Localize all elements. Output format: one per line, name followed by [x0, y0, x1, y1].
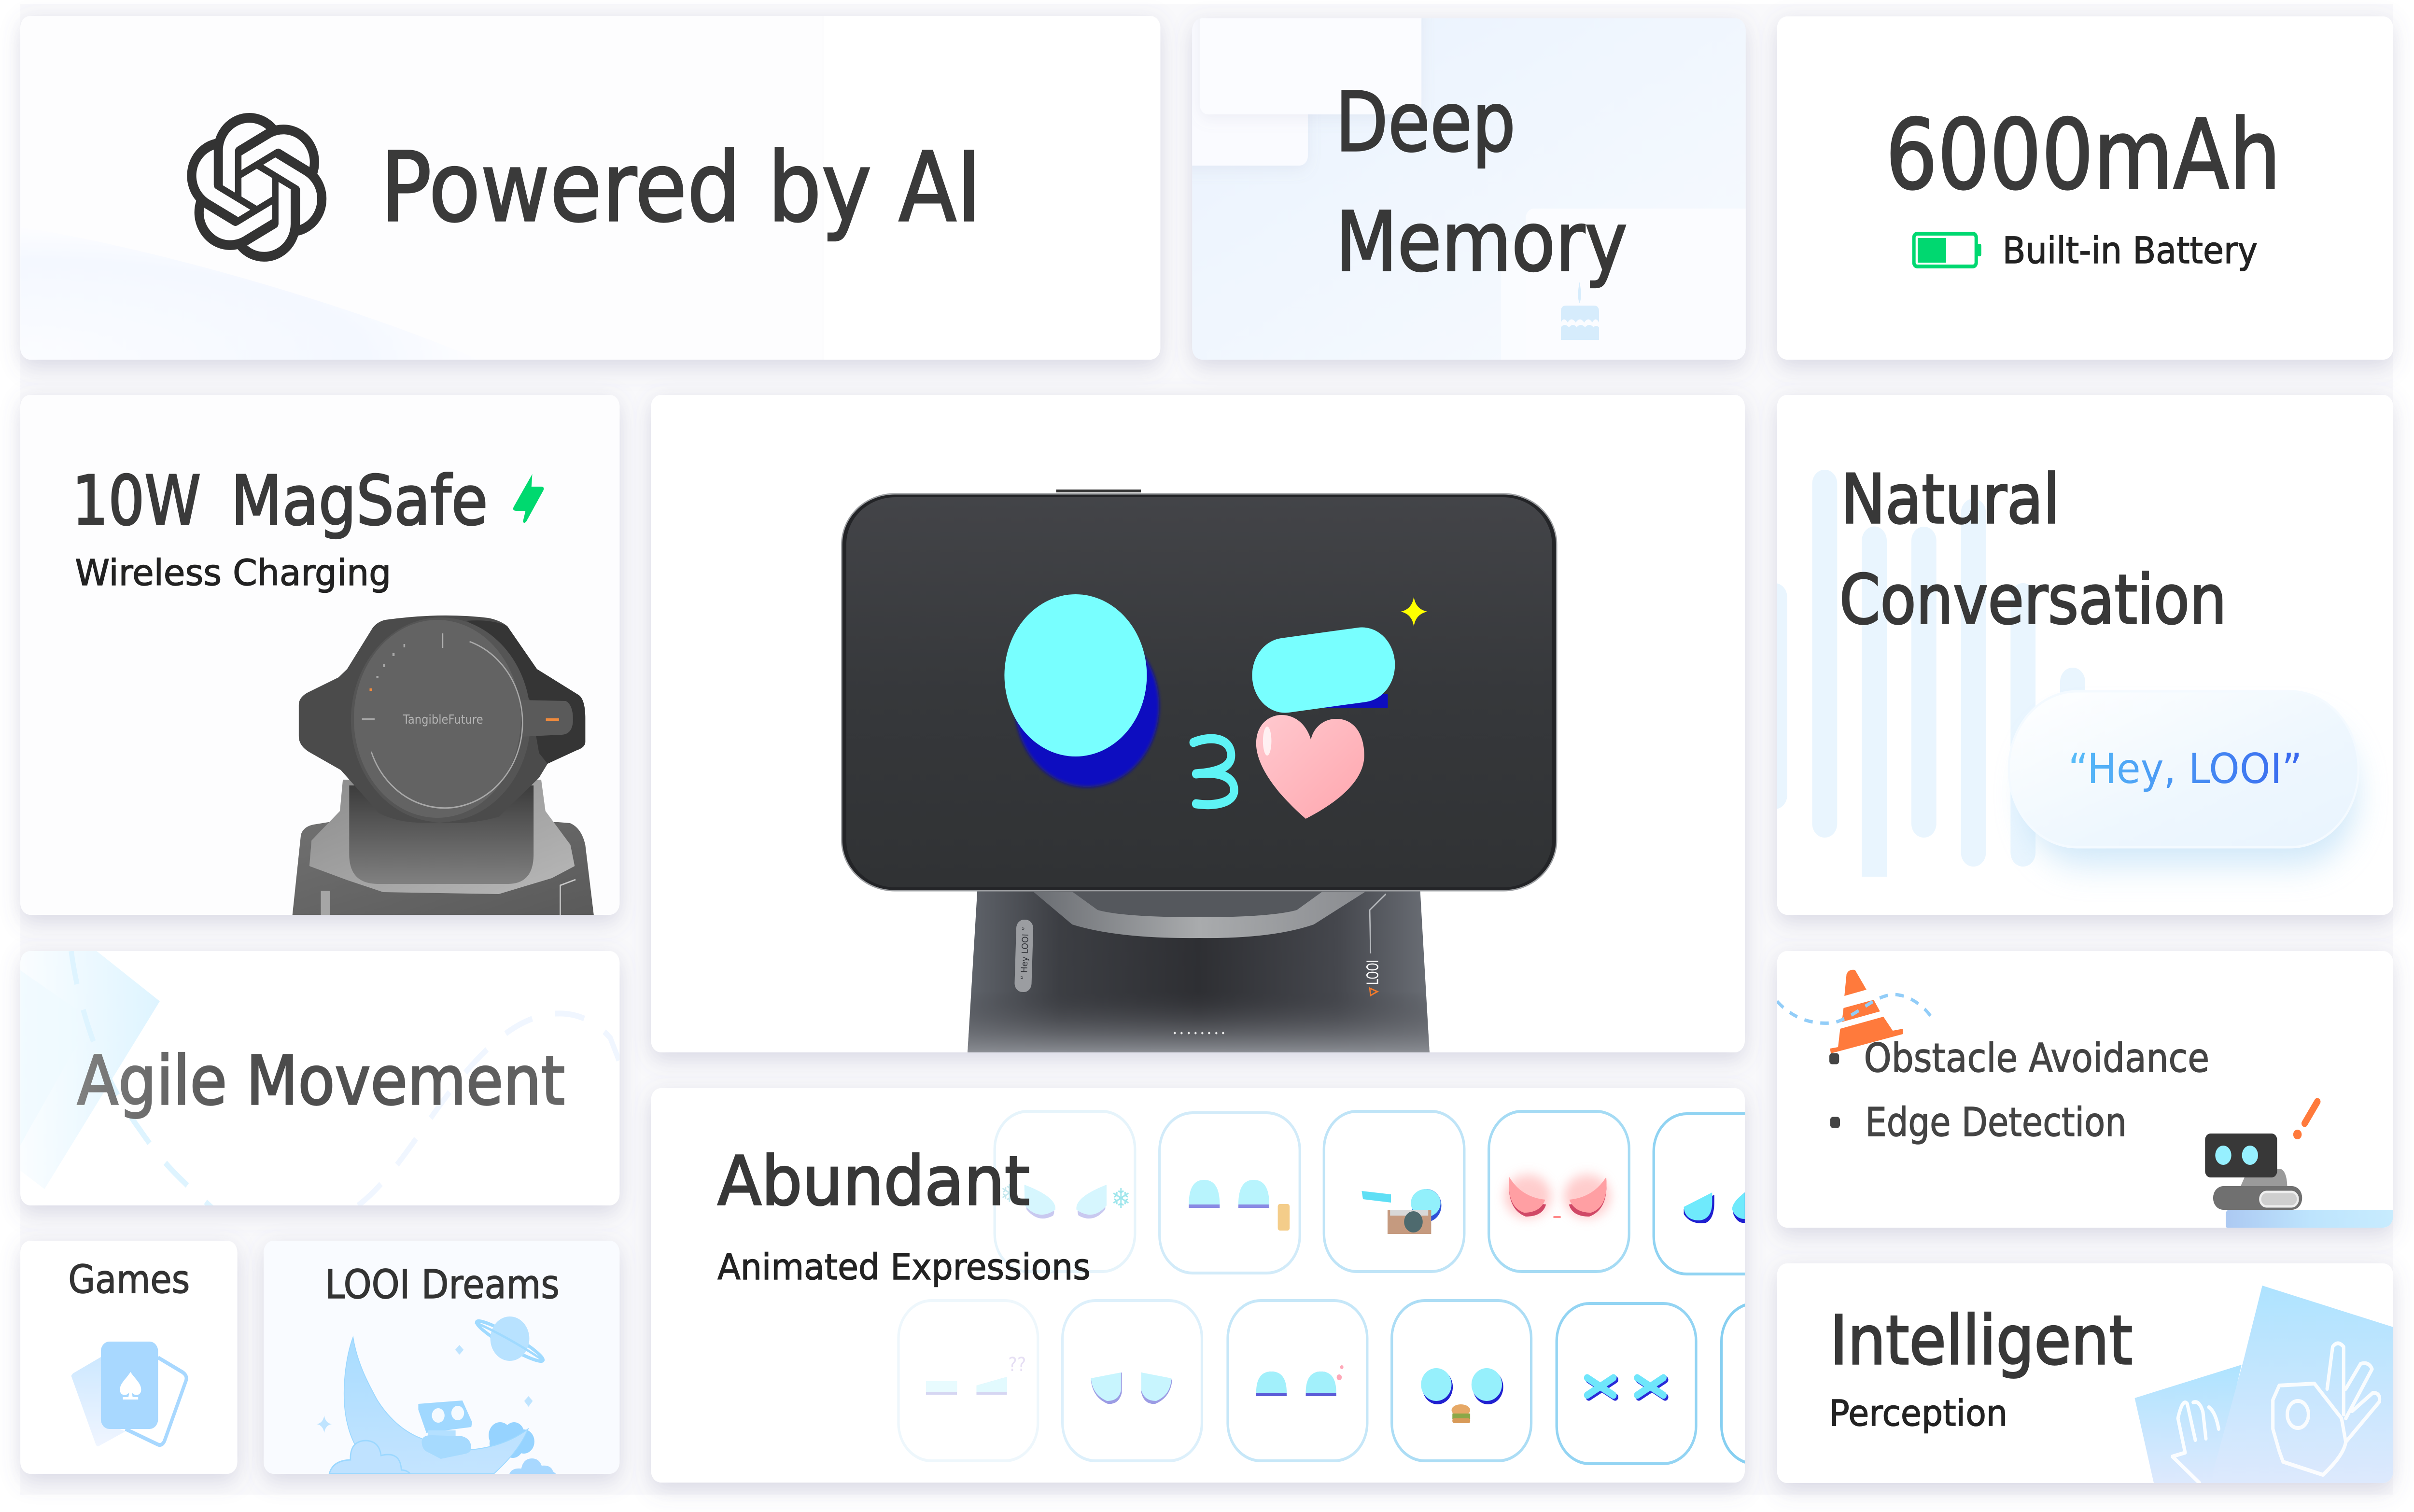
label: Hey LOOI pill: “ Hey LOOI ”	[1020, 926, 1031, 980]
expression: love hearts	[1256, 1365, 1344, 1396]
illustration: robot stand	[968, 891, 1430, 1052]
callout: Hey, LOOI pill	[2009, 691, 2358, 847]
list: obstacle features	[1830, 1036, 2209, 1146]
panel: Agile Movement	[20, 951, 619, 1212]
heading: 10W MagSafe	[72, 462, 488, 541]
panel: Natural Conversation	[1762, 395, 2393, 915]
icon: playing cards	[71, 1342, 186, 1446]
panel: LOOI Dreams	[264, 1241, 619, 1474]
icon: traffic cone	[1830, 970, 1903, 1053]
face: right eye	[1285, 665, 1372, 706]
label: TangibleFuture: TangibleFuture	[403, 712, 483, 727]
icon: pink heart	[1256, 715, 1364, 819]
decoration: dashed path	[1777, 994, 1932, 1023]
text: Perception: Perception	[1829, 1393, 2007, 1434]
expression: snow eyes	[1000, 1179, 1131, 1218]
heading: 10W MagSafe: MagSafe	[231, 462, 488, 541]
heading: 10W MagSafe: 10W	[72, 462, 201, 541]
icon: AI knot logo	[187, 113, 326, 262]
expression: snow eyes: ❄	[1000, 1179, 1019, 1208]
illustration: hand gesture cards	[2135, 1286, 2393, 1483]
heading: Deep Memory	[1335, 75, 1628, 290]
icon: birthday cake	[1561, 282, 1599, 340]
expression: question marks: ??	[1008, 1353, 1026, 1376]
decoration: voice bars	[1762, 470, 2085, 877]
icon: yellow sparkle	[1401, 597, 1427, 627]
heading: Agile Movement: Agile Movement	[77, 1042, 565, 1120]
illustration: phone	[842, 490, 1557, 891]
heading: 6000mAh: 6000mAh	[1885, 99, 2281, 211]
panel: 6000mAh battery	[1777, 16, 2393, 360]
expression: camera	[1361, 1189, 1441, 1234]
expressions: row two	[898, 1301, 1861, 1464]
face: left eye	[1004, 594, 1159, 787]
illustration: robot on the moon	[317, 1316, 556, 1474]
expression: drop eyes	[1684, 1192, 1745, 1223]
panel: Powered by AI	[20, 16, 1160, 360]
panel: central phone on robot	[651, 395, 1745, 1052]
face: kiss mouth	[1193, 739, 1234, 805]
heading: Natural Conversation	[1839, 460, 2227, 640]
heading: Deep Memory: Deep	[1335, 75, 1516, 170]
illustration: MagSafe stand	[293, 616, 594, 915]
heading: LOOI Dreams: LOOI Dreams	[325, 1262, 560, 1308]
heading: Deep Memory: Memory	[1335, 195, 1628, 290]
expressions: row one	[995, 1111, 1794, 1274]
expression: beer	[1189, 1180, 1290, 1231]
heading: Natural Conversation: Natural	[1841, 460, 2060, 539]
callout: Hey, LOOI pill: “Hey, LOOI”	[2068, 745, 2302, 793]
icon: battery	[1914, 234, 1981, 266]
label: Hey LOOI pill	[1014, 919, 1034, 993]
panel: Abundant Animated Expressions	[651, 1088, 1861, 1483]
heading: Natural Conversation: Conversation	[1839, 560, 2227, 640]
expression: sleepy eyes	[1091, 1372, 1172, 1404]
expression: snow eyes: ❄	[1111, 1183, 1131, 1215]
panel: 10W MagSafe	[20, 395, 619, 915]
text: Animated Expressions: Animated Expressions	[717, 1246, 1091, 1288]
expression: X eyes	[1587, 1378, 1665, 1397]
icon: green lightning bolt	[513, 474, 544, 523]
list: obstacle features: Edge Detection	[1865, 1100, 2127, 1146]
list: obstacle features: Obstacle Avoidance	[1864, 1036, 2209, 1081]
panel: Intelligent Perception	[1777, 1263, 2393, 1483]
label: LOOI logo	[1364, 960, 1382, 995]
text: Wireless Charging: Wireless Charging	[75, 552, 391, 594]
heading: Intelligent: Intelligent	[1830, 1302, 2133, 1380]
text: Built-in Battery: Built-in Battery	[2003, 229, 2258, 272]
decoration: diamond and path	[20, 951, 619, 1212]
heading: Games: Games	[68, 1257, 190, 1302]
icon: exclamation mark	[2293, 1102, 2317, 1139]
expression: question marks	[926, 1353, 1026, 1395]
heading: Powered by AI: Powered by AI	[380, 132, 982, 244]
expression: blushing red eyes	[1504, 1175, 1611, 1218]
panel: Games	[20, 1241, 238, 1474]
heading: Abundant: Abundant	[717, 1142, 1030, 1221]
expression: burger	[1421, 1368, 1503, 1423]
icon: robot at edge	[2205, 1134, 2395, 1229]
label: LOOI logo: LOOI	[1364, 960, 1382, 985]
panel: Obstacle Avoidance	[1777, 951, 2395, 1229]
panel: Deep Memory	[1178, 0, 1763, 373]
